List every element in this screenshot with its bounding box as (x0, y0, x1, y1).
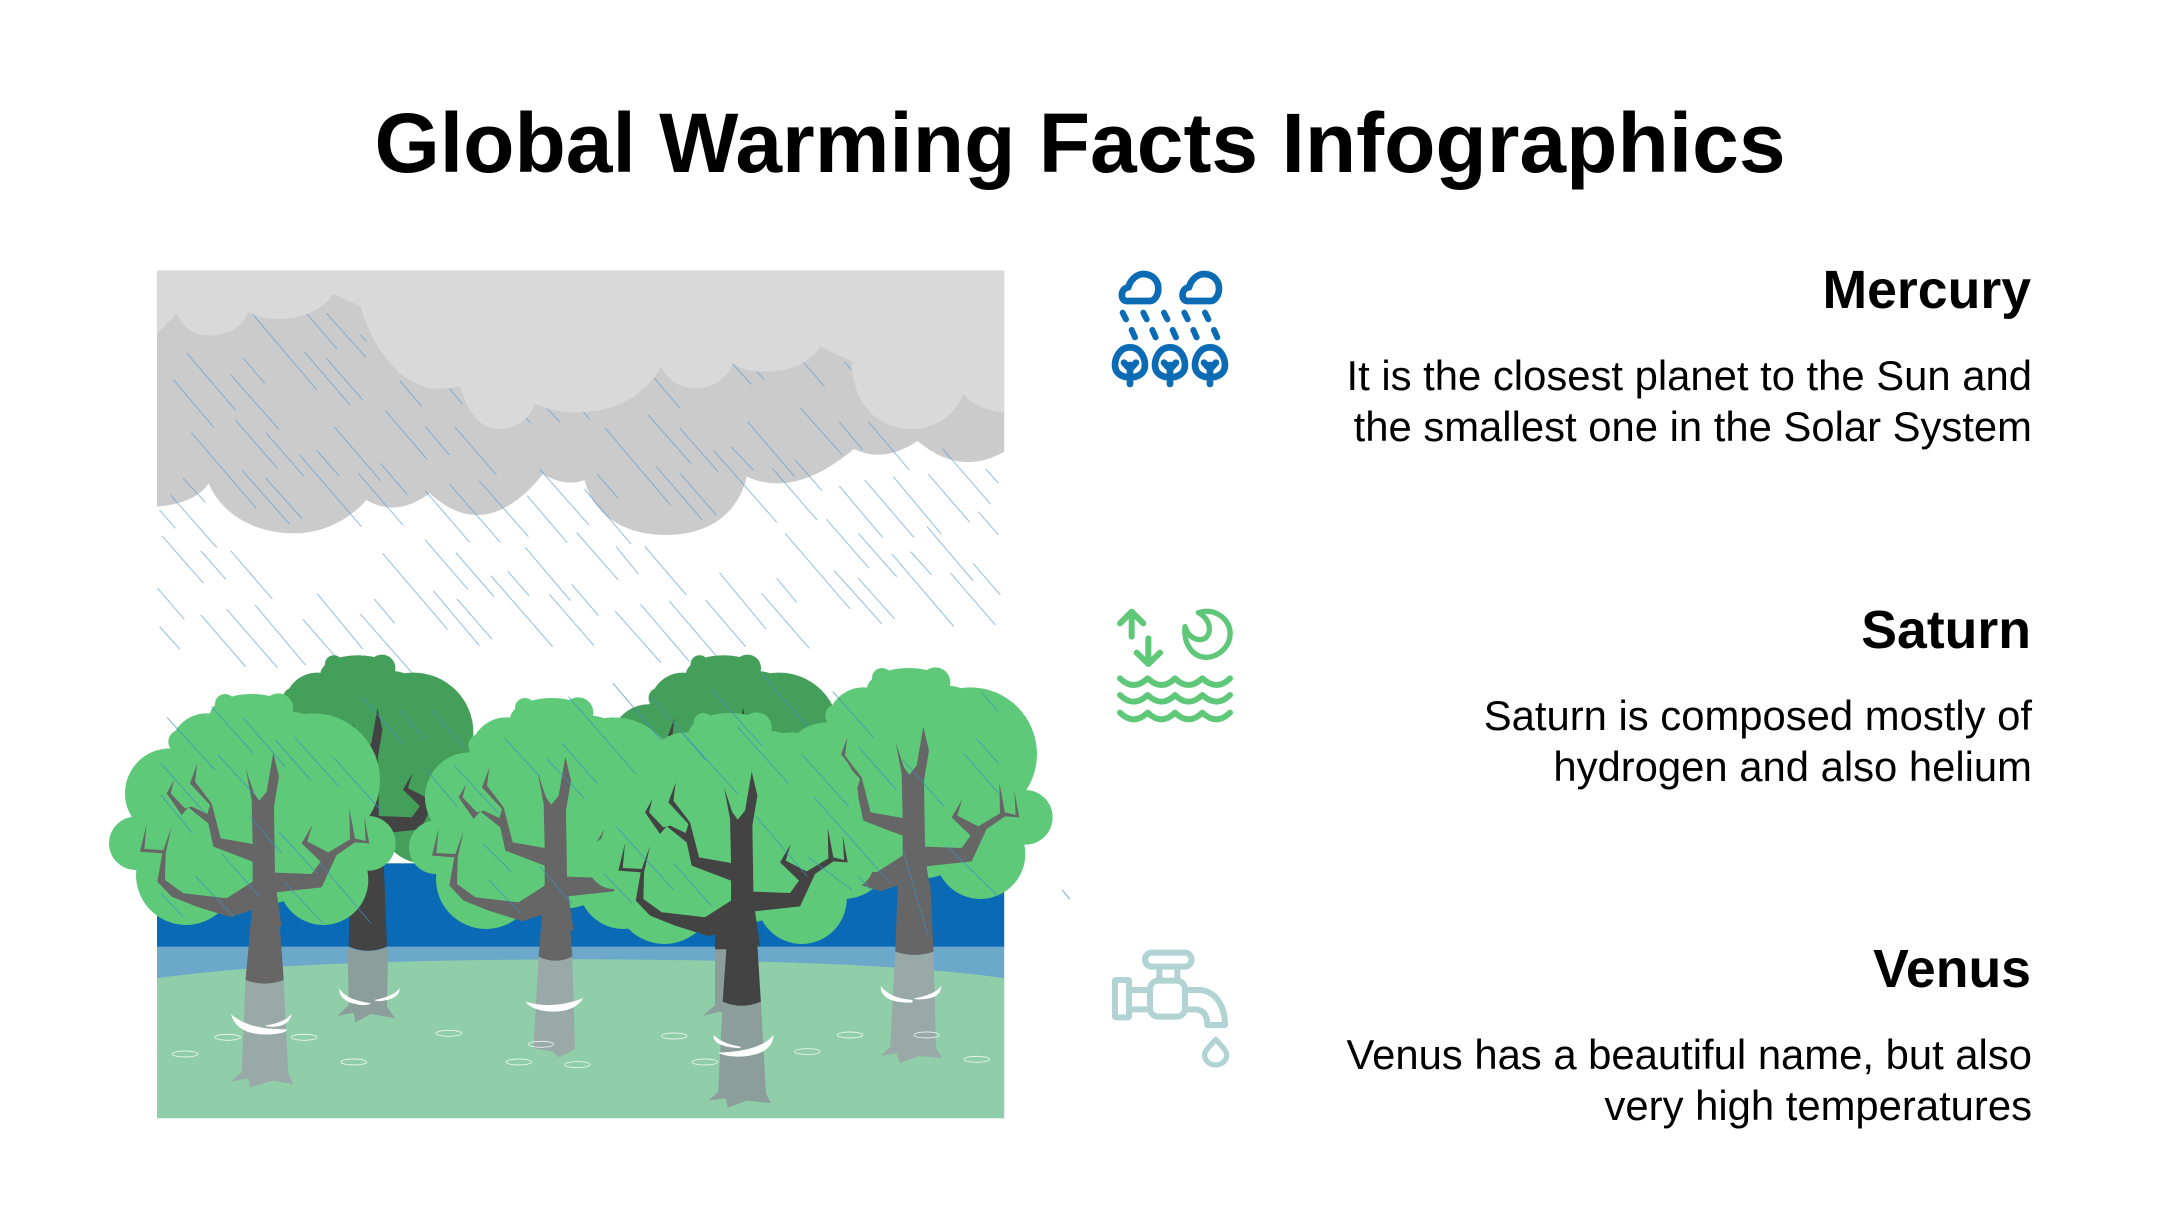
icon: tides, arrows and moon (1120, 611, 1230, 719)
heading: Mercury: Mercury (1822, 260, 2031, 320)
text: Mercury description: It is the closest planet to the Sun and (1347, 352, 2032, 399)
back tree right (595, 655, 853, 1016)
front tree 1 (109, 693, 396, 1088)
front tree 2 (409, 697, 696, 1057)
icon: dripping tap (1115, 953, 1227, 1065)
text: Saturn description (1484, 692, 2032, 790)
text: Mercury description: the smallest one in the Solar System (1354, 403, 2032, 450)
title: Global Warming Facts Infographics (374, 96, 1786, 190)
back cloud layer (157, 271, 1004, 535)
text: Venus description: Venus has a beautiful name, but also (1346, 1031, 2032, 1078)
heading: Venus: Venus (1873, 939, 2031, 999)
text: Mercury description (1347, 352, 2032, 450)
text: Venus description: very high temperatures (1605, 1082, 2032, 1129)
text: Saturn description: hydrogen and also helium (1553, 743, 2032, 790)
front cloud layer (157, 271, 1004, 429)
icon: rain clouds over trees (1115, 274, 1225, 384)
rain over trees (161, 675, 1070, 937)
flood water and ground (157, 863, 1004, 1118)
text: Venus description (1346, 1031, 2032, 1129)
back tree left (230, 655, 488, 1023)
heading: Saturn: Saturn (1861, 600, 2031, 660)
text: Saturn description: Saturn is composed mostly of (1484, 692, 2032, 739)
water ripples (172, 1030, 990, 1068)
rain over sky (158, 313, 1000, 673)
front tree 4 (766, 667, 1053, 1063)
front tree 3 (dark trunk) (587, 712, 874, 1108)
